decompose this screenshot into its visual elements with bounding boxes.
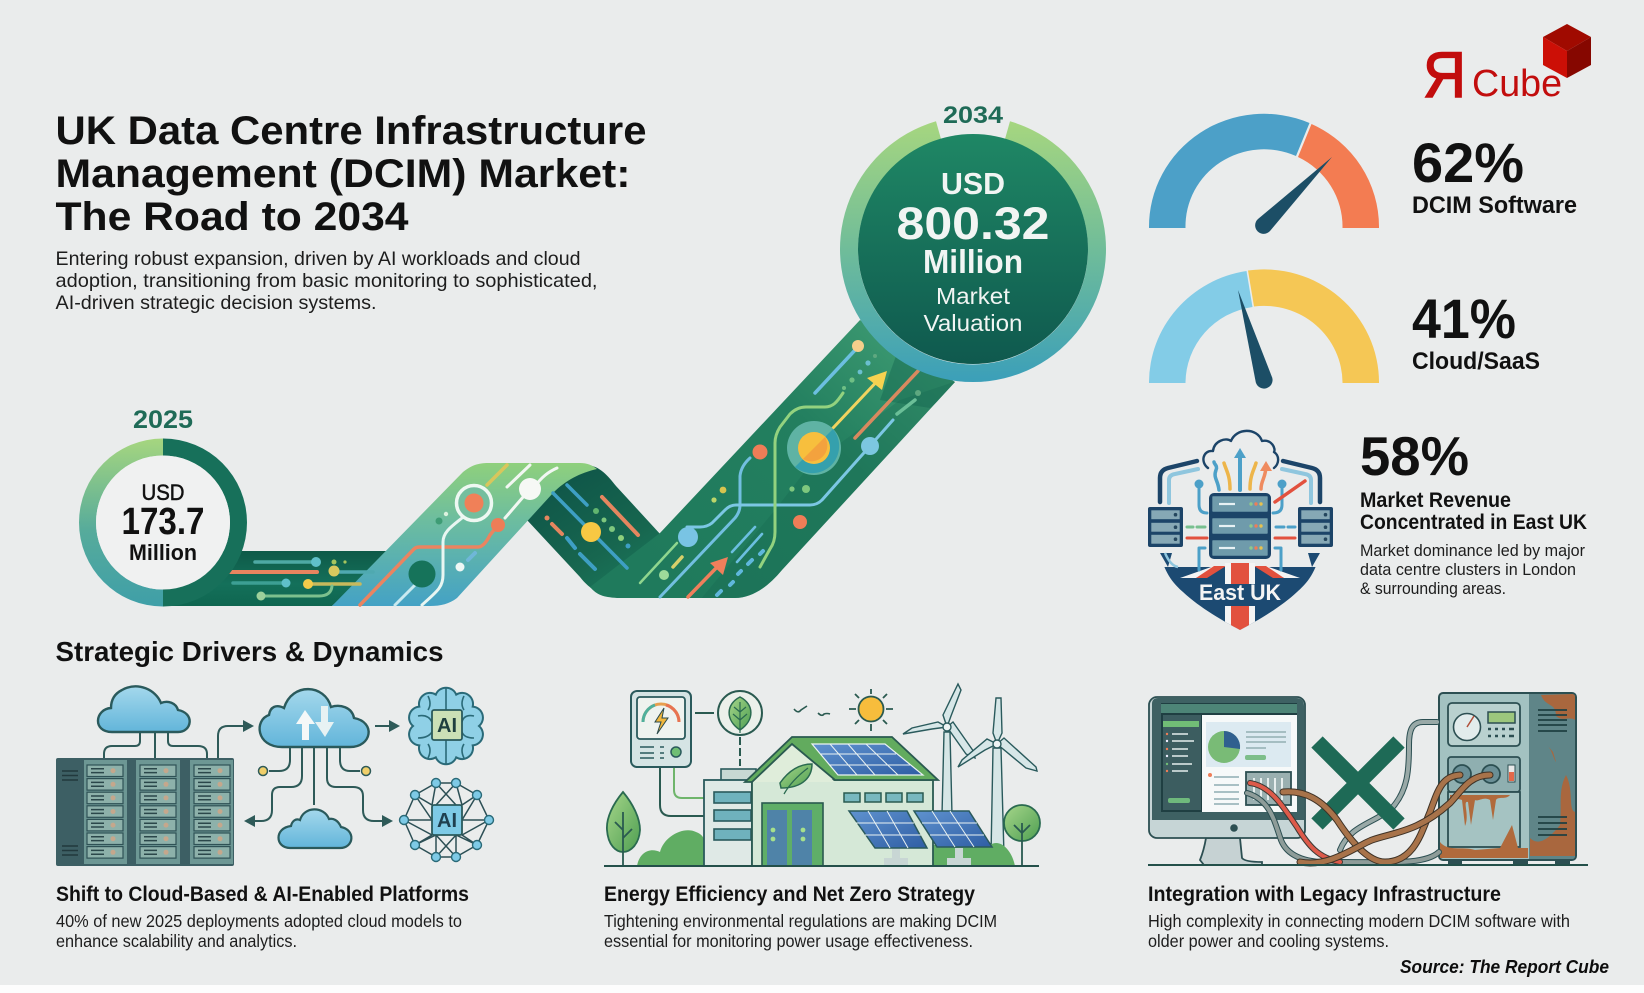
- icon: red cube: [1543, 24, 1591, 78]
- logo: RCube: [1423, 24, 1591, 111]
- circle: 2034 market valuation: 800.32: [896, 198, 1050, 249]
- stat: 58% market revenue: 58%: [1360, 425, 1469, 487]
- driver text: legacy integration: High complexity in connecting modern DCIM software with: [1148, 911, 1570, 931]
- circle: 2034 market valuation: [840, 121, 1106, 382]
- circuit details: light rise: [360, 465, 557, 605]
- driver text: energy efficiency: [604, 883, 997, 951]
- circuit details: flat: [230, 562, 373, 596]
- circle: 2034 market valuation: Market: [936, 283, 1011, 309]
- source note: Source: The Report Cube: [1400, 957, 1609, 977]
- donut: 2025 market value: USD: [142, 480, 184, 505]
- ground solar panels: [849, 811, 992, 866]
- stat: 58% market revenue: Concentrated in East UK: [1360, 511, 1587, 534]
- connectors: [104, 726, 392, 821]
- title: The Road to 2034: [56, 195, 409, 239]
- stat: 62% DCIM Software: 62%: [1412, 131, 1524, 194]
- stat: 58% market revenue: [1360, 425, 1587, 598]
- icon: AI neural network: [400, 778, 494, 862]
- cables behind cross: [1247, 722, 1439, 862]
- driver text: legacy integration: older power and cooling systems.: [1148, 931, 1389, 951]
- title: [56, 109, 646, 239]
- icon: AI neural network: AI: [437, 810, 457, 832]
- logo wordmark: [1423, 38, 1562, 111]
- driver text: cloud and AI: enhance scalability and analytics.: [56, 931, 297, 951]
- stat: 41% Cloud/SaaS: Cloud/SaaS: [1412, 348, 1540, 375]
- circle: 2034 market valuation: Million: [923, 243, 1023, 280]
- house: [745, 737, 938, 866]
- stat: 58% market revenue: Market dominance led by major: [1360, 542, 1585, 560]
- subtitle text block: Entering robust expansion, driven by AI workloads and cloud: [56, 248, 580, 270]
- gauge: DCIM software 62%: [1149, 114, 1379, 234]
- circle: 2034 market valuation: Valuation: [924, 310, 1022, 336]
- tree right: [1004, 805, 1040, 866]
- central server: [1209, 493, 1271, 559]
- cloud: top left: [98, 686, 190, 732]
- monitor: [1149, 697, 1305, 865]
- shield frame: [1160, 431, 1320, 570]
- left server: [1148, 507, 1183, 547]
- energy meter: [631, 691, 740, 816]
- ribbon segment: flat start: [163, 551, 392, 606]
- ribbon segment: falling dark fold: [527, 465, 661, 597]
- driver text: cloud and AI: 40% of new 2025 deployments adopted cloud models to: [56, 911, 462, 931]
- stat: 62% DCIM Software: DCIM Software: [1412, 192, 1577, 219]
- icon: energy efficient building: [604, 684, 1040, 866]
- driver text: legacy integration: [1148, 883, 1570, 951]
- icon: leaf badge: [718, 691, 762, 735]
- right server: [1298, 507, 1333, 547]
- brown cables over cross: [1283, 775, 1490, 863]
- circle: 2034 market valuation: USD: [941, 166, 1005, 201]
- driver text: energy efficiency: Energy Efficiency and Net Zero Strategy: [604, 883, 975, 906]
- logo wordmark: Я: [1423, 38, 1466, 111]
- ribbon segment: final rise: [590, 320, 955, 598]
- stat: 58% market revenue: data centre clusters in London: [1360, 561, 1576, 579]
- circuit details: final rise: [640, 348, 918, 597]
- cloud: central with data arrows: [260, 689, 369, 747]
- legacy power unit: [1439, 693, 1576, 866]
- icon: cloud and AI platforms: [56, 686, 494, 866]
- subtitle text block: [56, 248, 598, 314]
- icon: AI brain: [409, 688, 483, 764]
- office block: [704, 769, 756, 866]
- icon: legacy integration: [1148, 693, 1588, 866]
- stat: 58% market revenue: & surrounding areas.: [1360, 580, 1506, 598]
- donut: 2025 market value: [79, 438, 247, 606]
- icon: East UK shield: [1148, 431, 1333, 635]
- icon: X mark: [1317, 742, 1399, 824]
- wind turbines: [903, 684, 1037, 855]
- driver text: energy efficiency: Tightening environmental regulations are making DCIM: [604, 911, 997, 931]
- year label 2034: 2034: [943, 102, 1004, 129]
- title: UK Data Centre Infrastructure: [56, 109, 646, 153]
- driver text: legacy integration: Integration with Legacy Infrastructure: [1148, 883, 1501, 906]
- icon: AI brain: AI: [437, 715, 457, 737]
- growth ribbon chart: [163, 320, 960, 606]
- driver text: energy efficiency: essential for monitoring power usage effectiveness.: [604, 931, 973, 951]
- donut: 2025 market value: 173.7: [122, 501, 204, 543]
- circuit details: dark fold: [552, 485, 638, 569]
- shield label: East UK: [1199, 580, 1281, 605]
- shield base: [1160, 553, 1320, 630]
- subtitle text block: adoption, transitioning from basic monitoring to sophisticated,: [56, 270, 598, 292]
- stat: 62% DCIM Software: [1412, 131, 1577, 219]
- driver text: cloud and AI: [56, 883, 469, 951]
- bushes: [637, 830, 1015, 866]
- stat: 58% market revenue: Market Revenue: [1360, 489, 1511, 512]
- subtitle text block: AI-driven strategic decision systems.: [56, 292, 377, 314]
- server rack: [56, 758, 234, 866]
- heading: strategic drivers: Strategic Drivers & Dynamics: [56, 636, 444, 667]
- tree left: [607, 792, 640, 866]
- gauge: Cloud/SaaS 41%: [1149, 269, 1379, 389]
- stat: 41% Cloud/SaaS: [1412, 287, 1540, 375]
- driver text: cloud and AI: Shift to Cloud-Based & AI-Enabled Platforms: [56, 883, 469, 906]
- cloud: lower: [278, 809, 351, 848]
- stat: 41% Cloud/SaaS: 41%: [1412, 287, 1516, 350]
- icon: sun and birds: [794, 689, 893, 731]
- logo wordmark: Cube: [1472, 63, 1562, 105]
- year label 2025: 2025: [133, 406, 193, 434]
- ribbon segment: light rising fold: [332, 463, 597, 606]
- donut: 2025 market value: Million: [129, 540, 197, 565]
- title: Management (DCIM) Market:: [56, 152, 630, 196]
